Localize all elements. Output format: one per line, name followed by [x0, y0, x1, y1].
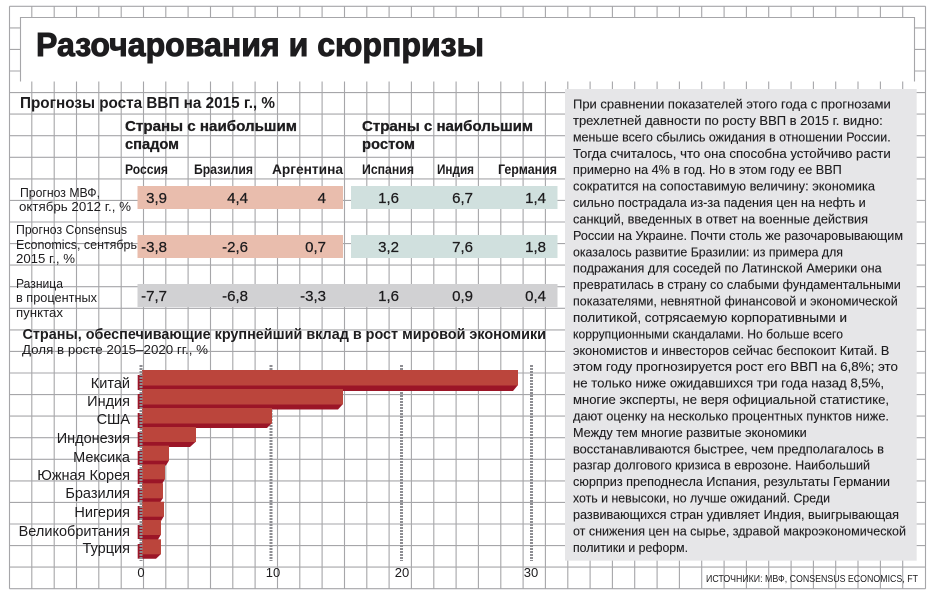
bar: China [138, 370, 518, 391]
axis value labels: 20 [395, 565, 409, 580]
article text: санкций, введенных в ответ на военные действия [573, 212, 868, 226]
article text: этом году прогнозируется рост его ВВП на 6,8%; это [573, 360, 898, 374]
text panel [565, 89, 917, 561]
table row: Consensus Economics forecast: Прогноз Consensus [16, 223, 127, 237]
country labels: Турция [83, 541, 130, 557]
country labels: США [97, 412, 130, 428]
article text: не только ниже ожидавшихся три года назад 8,5%, [573, 377, 884, 391]
heading: countries with biggest growth: ростом [362, 136, 415, 153]
bar: India [138, 389, 343, 410]
country labels: Китай [91, 376, 130, 392]
article text: меньше всего сбылись ожидания в отношении России. [573, 130, 891, 144]
table row: difference in percentage points: -6,8 [222, 288, 248, 305]
bar: South Korea [138, 464, 165, 484]
heading: countries with biggest decline [125, 118, 297, 153]
country labels: Нигерия [74, 505, 130, 521]
heading: countries with biggest growth [362, 118, 533, 153]
table row: IMF forecast [19, 186, 558, 214]
article text: от снижения цен на сырье, здравой макроэкономической [573, 524, 906, 538]
table row: difference in percentage points: в процентных [16, 291, 98, 305]
table row: IMF forecast: октябрь 2012 г., % [19, 200, 131, 214]
article text: экономистов и инвесторов сейчас беспокоит Китай. В [573, 344, 889, 358]
article text: показателями, невнятной финансовой и экономической [573, 294, 898, 308]
table row: Consensus Economics forecast: 7,6 [452, 239, 473, 256]
table row: difference in percentage points [16, 277, 558, 320]
table row: IMF forecast: 6,7 [452, 190, 473, 207]
bar: Nigeria [138, 502, 164, 521]
article text: разгар долгового кризиса в еврозоне. Наибольший [573, 459, 870, 473]
article text: Между тем многие развитые экономики [573, 426, 807, 440]
country labels: Бразилия [65, 486, 130, 502]
heading: countries with biggest growth: Страны с наибольшим [362, 118, 533, 135]
axis value labels: 0 [137, 565, 145, 580]
table column headers: Бразилия [194, 162, 253, 177]
table row: Consensus Economics forecast: 0,7 [305, 239, 326, 256]
table row: Consensus Economics forecast: Economics, сентябрь [16, 238, 137, 252]
table column headers: Индия [437, 162, 474, 177]
table column headers: Аргентина [272, 162, 343, 177]
table row: IMF forecast: 3,9 [146, 190, 167, 207]
table row: Consensus Economics forecast: -2,6 [222, 239, 248, 256]
article text: политикой, сотрясаемую корпоративными и [573, 311, 847, 325]
article text: подражания для соседей по Латинской Америки она [573, 262, 882, 276]
article text: трехлетней давности по росту ВВП в 2015 г. видно: [573, 114, 883, 128]
article text: сократится на сопоставимую величину: экономика [573, 180, 875, 194]
article text: многие эксперты, не веря официальной статистике, [573, 393, 889, 407]
article text: политики и реформ. [573, 541, 688, 555]
article text: хоть и невысоки, но лучше ожиданий. Среди [573, 492, 830, 506]
country labels: Мексика [73, 450, 131, 466]
article text: дают оценку на несколько процентных пунктов ниже. [573, 410, 889, 424]
article text: При сравнении показателей этого года с прогнозами [573, 98, 891, 112]
country labels: Индия [87, 394, 130, 410]
table column headers: Россия [125, 162, 168, 177]
table row: IMF forecast: 4 [318, 190, 326, 207]
table row: Consensus Economics forecast: 3,2 [378, 239, 399, 256]
table row: difference in percentage points: -7,7 [141, 288, 167, 305]
table row: Consensus Economics forecast: 2015 г., % [16, 252, 75, 266]
article text: превратилась в страну со слабыми фундаментальными [573, 278, 901, 292]
article text [573, 98, 906, 555]
country labels [19, 376, 131, 557]
article text: примерно на 4% в год. Но в этом году ее ВВП [573, 163, 842, 177]
article text: оказалось развитие Бразилии: из примера для [573, 245, 843, 259]
article text: сильно пострадала из-за падения цен на нефть и [573, 196, 866, 210]
bar: Brazil [138, 483, 163, 502]
table row: difference in percentage points: 1,6 [378, 288, 399, 305]
country labels: Индонезия [57, 431, 130, 447]
table column headers: Германия [498, 162, 557, 177]
zero axis [140, 365, 142, 561]
table column headers [125, 162, 557, 177]
table row: IMF forecast: 4,4 [227, 190, 248, 207]
table row: IMF forecast: 1,6 [378, 190, 399, 207]
bar: Mexico [138, 446, 169, 466]
bar: UK [138, 520, 161, 540]
heading: countries with biggest decline: Страны с наибольшим [125, 118, 297, 135]
article text: развивающихся стран удивляет Индия, выигрывающая [573, 508, 899, 522]
table row: difference in percentage points: -3,3 [300, 288, 326, 305]
article text: коррупционными скандалами. Но больше всего [573, 327, 843, 341]
bar: Turkey [138, 539, 161, 559]
axis value labels: 30 [524, 565, 538, 580]
country labels: Южная Корея [37, 468, 130, 484]
title: Разочарования и сюрпризы [36, 26, 484, 63]
title panel [20, 18, 914, 82]
chart subheading: Доля в росте 2015–2020 гг., % [22, 342, 208, 357]
table row: difference in percentage points: 0,4 [525, 288, 546, 305]
article text: сюрприз преподнесла Испания, результаты Германии [573, 475, 890, 489]
axis value labels: 10 [266, 565, 280, 580]
bar: USA [138, 408, 272, 428]
heading: GDP forecasts: Прогнозы роста ВВП на 2015 г., % [20, 95, 275, 112]
table row: IMF forecast: Прогноз МВФ, [20, 186, 100, 200]
table row: Consensus Economics forecast: 1,8 [525, 239, 546, 256]
article text: Тогда считалось, что она способна устойчиво расти [573, 147, 891, 161]
heading: countries with biggest decline: спадом [125, 136, 179, 153]
table row: Consensus Economics forecast: -3,8 [141, 239, 167, 256]
axis lines [271, 365, 532, 561]
article text: восстанавливаются быстрее, чем предполагалось в [573, 442, 884, 456]
bar chart: contribution to world growth [19, 365, 538, 580]
article text: России на Украине. Почти столь же разочаровывающим [573, 229, 903, 243]
chart heading: Страны, обеспечивающие крупнейший вклад в рост мировой экономики [22, 326, 546, 343]
table row: difference in percentage points: Разница [16, 277, 63, 291]
table row: IMF forecast: 1,4 [525, 190, 546, 207]
table row: difference in percentage points: 0,9 [452, 288, 473, 305]
table column headers: Испания [362, 162, 414, 177]
country labels: Великобритания [19, 524, 130, 540]
axis value labels [137, 565, 538, 580]
bar: Indonesia [138, 427, 196, 447]
table row: difference in percentage points: пунктах [16, 306, 64, 320]
table row: Consensus Economics forecast [16, 223, 558, 266]
